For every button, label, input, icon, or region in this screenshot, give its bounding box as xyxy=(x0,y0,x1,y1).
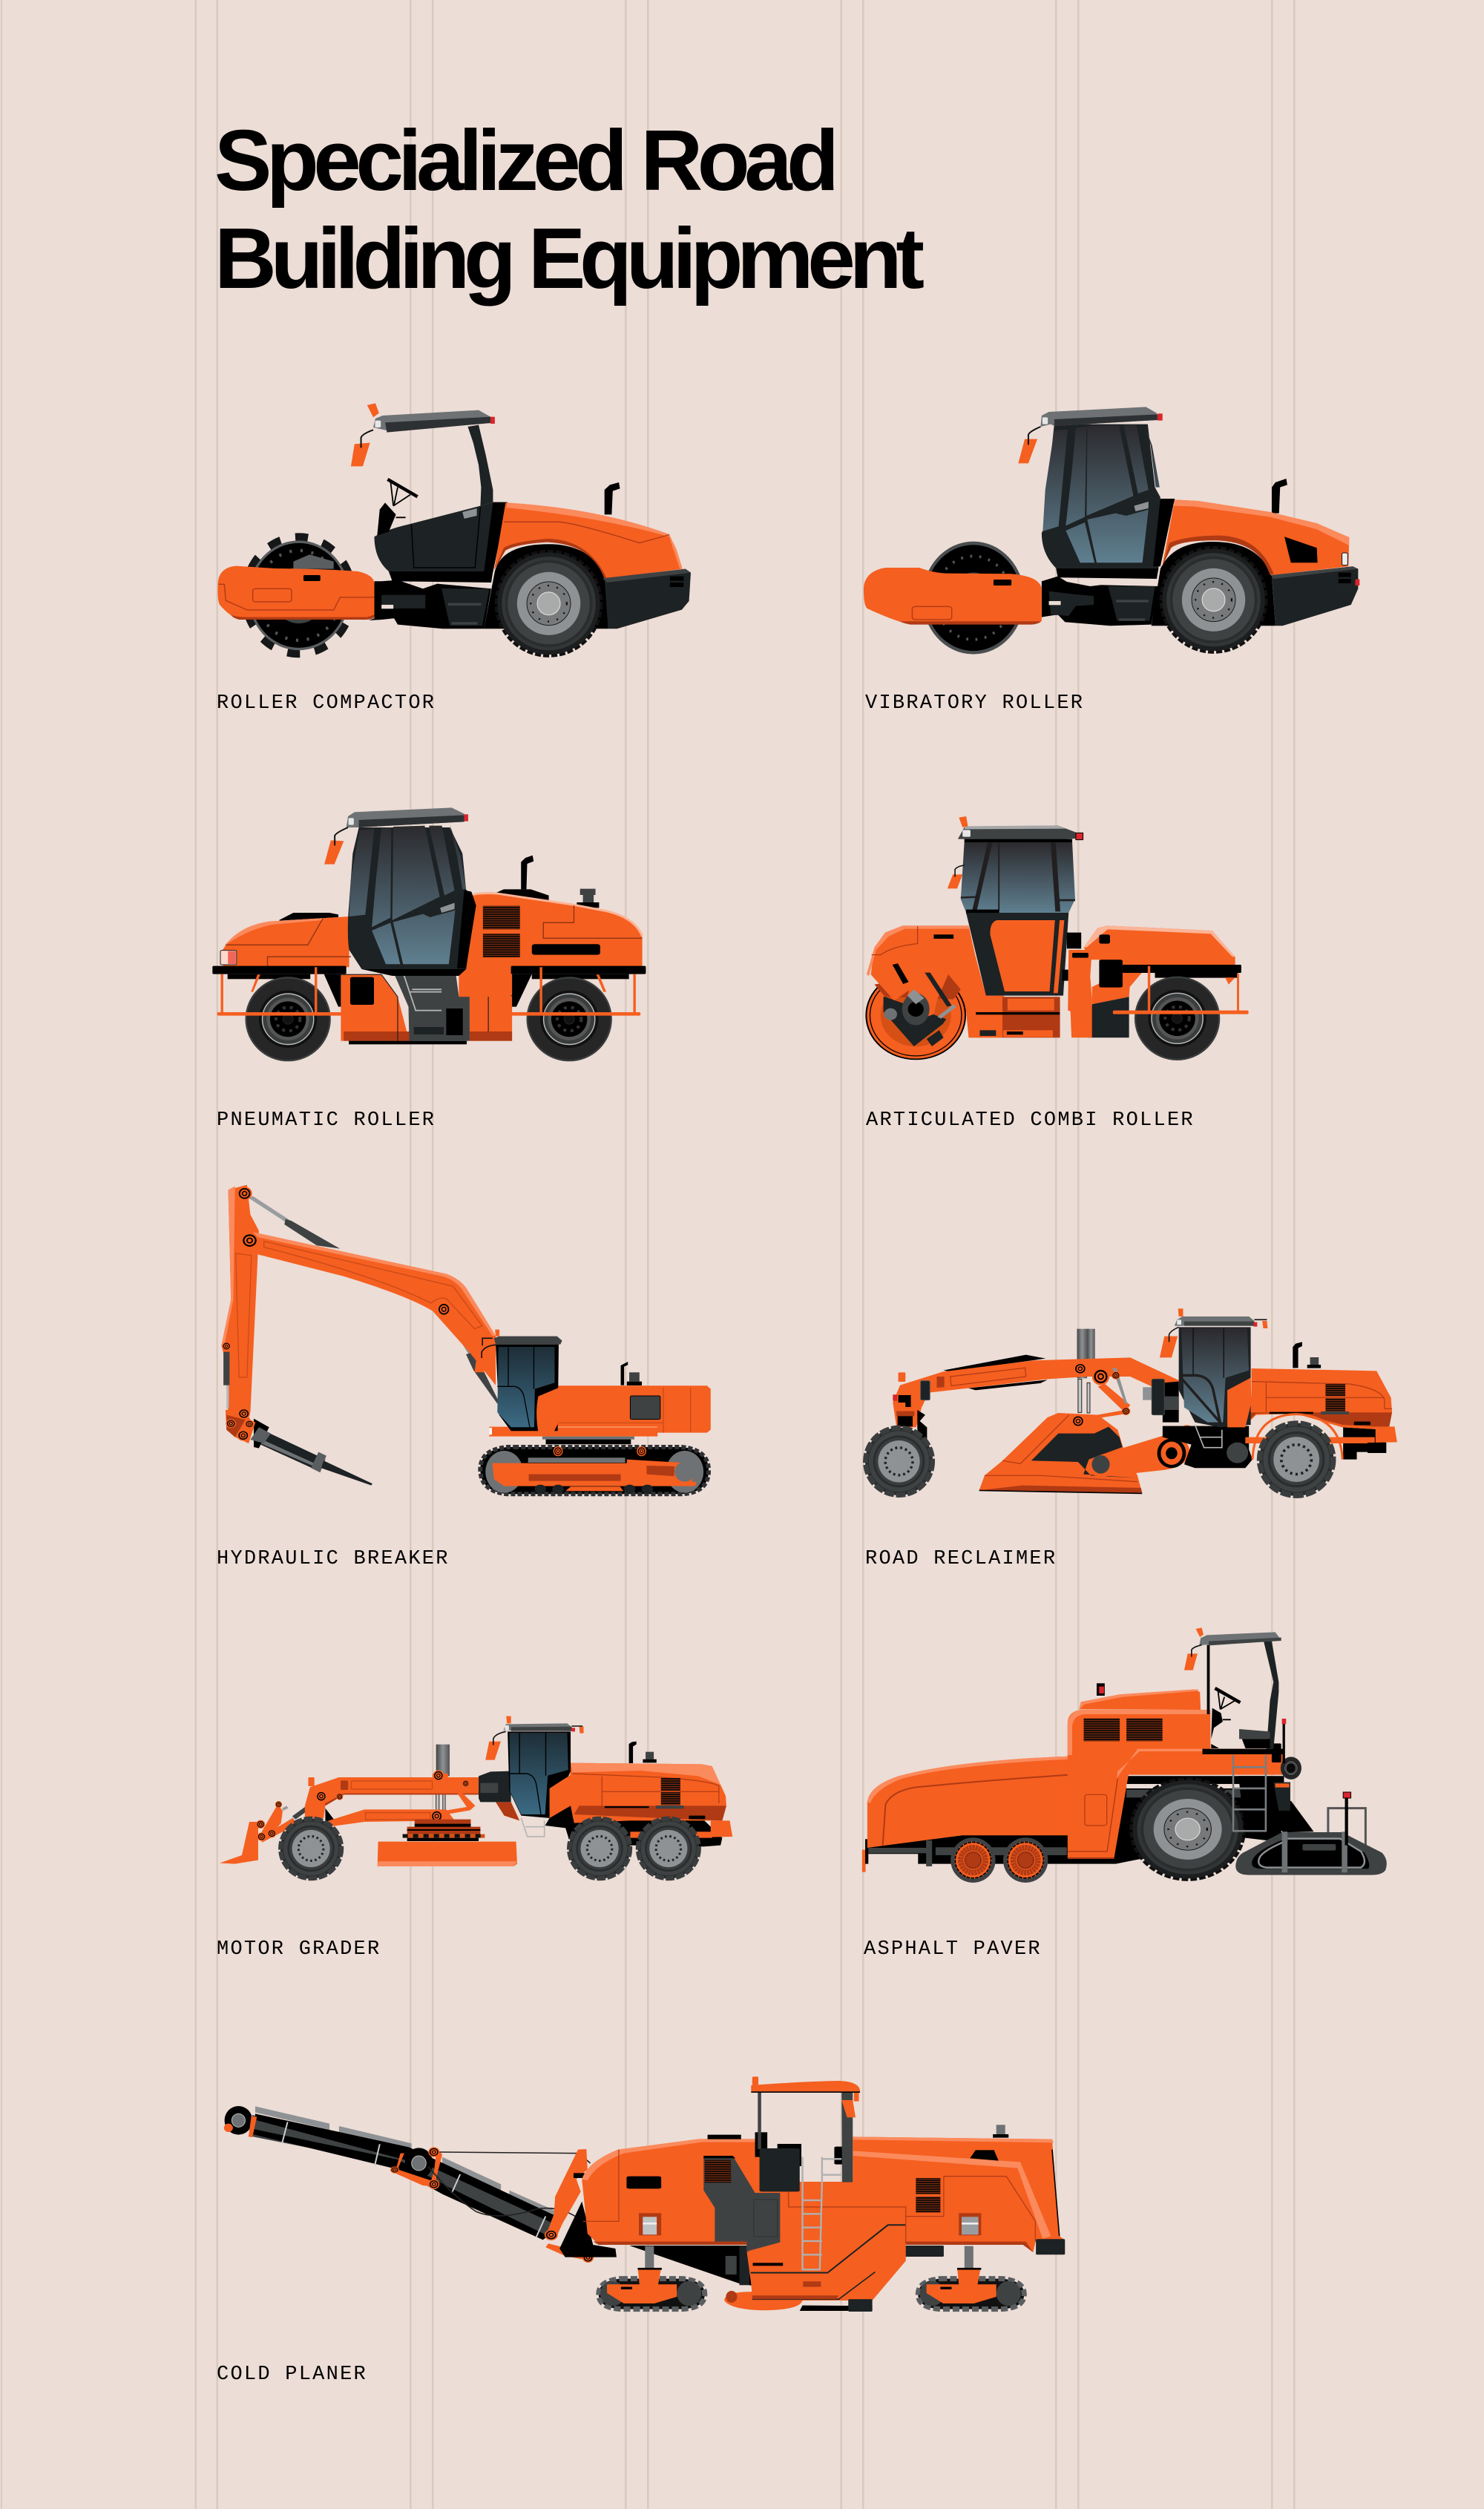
title: Building Equipment xyxy=(214,210,925,306)
label: hydraulic breaker: HYDRAULIC BREAKER xyxy=(217,1548,450,1570)
cab xyxy=(348,825,476,976)
cab xyxy=(1042,424,1175,579)
rotor arm xyxy=(1071,1362,1194,1477)
wheel xyxy=(496,551,601,656)
stick cylinder xyxy=(223,1352,246,1408)
cab xyxy=(1160,1308,1267,1427)
label: road reclaimer: ROAD RECLAIMER xyxy=(865,1548,1057,1570)
hopper xyxy=(867,1756,1082,1848)
canopy xyxy=(351,403,495,506)
yoke xyxy=(864,568,1042,625)
drum xyxy=(246,537,352,653)
rear wheel xyxy=(1135,977,1220,1060)
front hood xyxy=(220,913,351,967)
label: articulated combi roller: ARTICULATED COMBI ROLLER xyxy=(866,1109,1195,1132)
cab xyxy=(961,842,1075,996)
pins xyxy=(222,1187,450,1351)
vehicle: road reclaimer xyxy=(865,1308,1397,1496)
breaker xyxy=(226,1408,372,1486)
lower front body xyxy=(726,2191,906,2312)
columns xyxy=(436,1745,450,1811)
drum xyxy=(922,542,1025,655)
boom xyxy=(242,1233,496,1385)
rotor housing xyxy=(979,1413,1142,1494)
canopy xyxy=(948,816,1083,888)
frame xyxy=(369,580,491,629)
rear hood xyxy=(1152,479,1359,626)
grey access panel xyxy=(703,2156,780,2252)
front drum xyxy=(865,937,966,1060)
rear hood xyxy=(484,482,691,629)
rear body xyxy=(569,1742,732,1846)
wheels xyxy=(865,1414,1342,1496)
canopy xyxy=(1018,407,1163,463)
upper body xyxy=(489,1362,711,1444)
label: motor grader: MOTOR GRADER xyxy=(217,1938,381,1961)
vehicle: asphalt paver xyxy=(862,1627,1387,1883)
operator station xyxy=(708,2076,1065,2269)
bumper xyxy=(1113,966,1249,1014)
cab and nose xyxy=(479,1716,583,1839)
tracks xyxy=(599,2268,1024,2309)
frame xyxy=(1042,577,1158,626)
label: pneumatic roller: PNEUMATIC ROLLER xyxy=(217,1109,436,1132)
wheels xyxy=(212,966,646,1061)
cab xyxy=(475,1330,562,1434)
vehicle: motor grader xyxy=(220,1716,732,1879)
canopy xyxy=(324,807,468,865)
chassis xyxy=(1143,1379,1252,1468)
wheels xyxy=(951,1779,1244,1883)
ladder xyxy=(1233,1719,1314,1840)
hydraulic columns xyxy=(1077,1329,1095,1413)
center chassis xyxy=(341,967,512,1044)
front linkage and moldboard xyxy=(220,1797,322,1864)
vehicle: vibratory roller xyxy=(864,407,1359,655)
chassis xyxy=(862,1776,1284,1872)
label: cold planer: COLD PLANER xyxy=(217,2364,367,2386)
rear body xyxy=(1244,1342,1397,1460)
screed xyxy=(1235,1792,1387,1875)
underside xyxy=(629,2246,974,2286)
cab base xyxy=(374,502,508,583)
conveyor arms xyxy=(390,2147,617,2263)
label: roller compactor: ROLLER COMPACTOR xyxy=(217,692,436,715)
title xyxy=(214,112,925,306)
conveyor xyxy=(224,2106,556,2240)
frame xyxy=(305,1770,480,1827)
main body xyxy=(582,2136,1065,2310)
label: asphalt paver: ASPHALT PAVER xyxy=(864,1938,1042,1961)
steering and seat xyxy=(377,479,418,536)
boom cylinders xyxy=(249,1196,498,1404)
front body xyxy=(867,925,1060,1037)
circle and blade xyxy=(378,1820,517,1866)
roller yoke xyxy=(217,566,374,620)
vehicle: roller compactor xyxy=(217,403,691,656)
vehicle: hydraulic breaker xyxy=(221,1185,711,1494)
bumpers xyxy=(217,967,640,1016)
operator station xyxy=(1184,1627,1283,1762)
rear body xyxy=(1062,925,1241,1037)
title: Specialized Road xyxy=(214,112,839,209)
vehicle: cold planer xyxy=(224,2076,1065,2312)
track xyxy=(480,1446,709,1494)
rear hood xyxy=(459,856,643,997)
vehicle: pneumatic roller xyxy=(212,807,646,1061)
wheel xyxy=(1161,548,1266,652)
main body xyxy=(1068,1683,1284,1859)
main boom xyxy=(893,1355,1179,1445)
stick arm xyxy=(221,1185,259,1415)
label: vibratory roller: VIBRATORY ROLLER xyxy=(865,692,1084,715)
vehicle: articulated combi roller xyxy=(865,816,1249,1060)
wheels xyxy=(280,1818,699,1879)
